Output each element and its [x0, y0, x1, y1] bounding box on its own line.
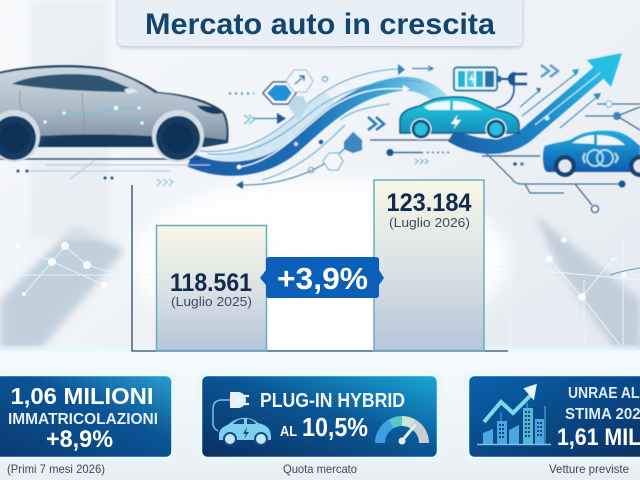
panel: plug-in hybrid: [202, 376, 438, 458]
bar: Luglio 2025: [156, 226, 266, 350]
lower arrowhead: [236, 181, 243, 189]
icon: plug and car: [213, 392, 271, 445]
right side circuit: [483, 104, 640, 205]
chevrons and arrow: [244, 115, 255, 124]
icon: rising chart with city: [477, 386, 551, 444]
road line: [370, 139, 460, 141]
panel: registrations: IMMATRICOLAZIONI: [8, 411, 158, 428]
panel: plug-in hybrid: PLUG-IN HYBRID: [260, 390, 405, 412]
title: Mercato auto in crescita: [145, 8, 495, 41]
growth arrow: [452, 53, 622, 146]
card glow: [0, 372, 640, 462]
bar: Luglio 2026: 123.184: [386, 189, 472, 217]
network decoration: left: [0, 238, 160, 296]
caption: forecast: Vetture previste: [549, 462, 629, 476]
icon: blue hybrid car: [543, 131, 640, 177]
panel: registrations: +8,9%: [46, 426, 113, 453]
arrowhead top: [398, 64, 405, 75]
white highlight line: [239, 89, 404, 167]
white gap between bars: [268, 298, 373, 350]
icon: battery and plug: [454, 68, 527, 108]
small top arrow: [412, 66, 433, 71]
panel: plug-in hybrid: 10,5%: [302, 412, 368, 442]
soft light under-swoosh: [200, 92, 336, 165]
growth badge: +3,9%: [277, 261, 368, 296]
hexagons: [263, 82, 296, 104]
panel: UNRAE forecast: [468, 376, 640, 458]
bar: Luglio 2026: [374, 180, 484, 350]
bar: Luglio 2026: (Luglio 2026): [389, 215, 470, 230]
bar: Luglio 2025: (Luglio 2025): [171, 294, 252, 309]
bar chart: [132, 180, 508, 351]
arrowhead highlight: [403, 85, 410, 92]
flow swoosh and circuit lines: [0, 64, 640, 212]
panel: registrations: 1,06 MILIONI: [10, 383, 154, 409]
blue chevrons: [368, 117, 384, 130]
growth badge: [260, 257, 384, 298]
network decoration: right: [490, 238, 640, 345]
panel: registrations: [0, 376, 172, 458]
icon: gauge: [380, 421, 424, 443]
title panel: [118, 0, 522, 46]
thin swoosh lines: [200, 69, 422, 180]
bar: Luglio 2025: 118.561: [170, 269, 252, 297]
caption: registrations: (Primi 7 mesi 2026): [7, 462, 105, 476]
small rising arrows: [520, 72, 598, 128]
chart axes: [132, 185, 508, 351]
connector: [386, 149, 394, 156]
icon: teal electric car: [400, 97, 519, 140]
dots: [229, 92, 254, 95]
main blue swoosh: [190, 84, 442, 169]
panel: plug-in hybrid: AL: [280, 423, 297, 440]
lower returning line: [240, 145, 348, 185]
caption: market share: Quota mercato: [283, 462, 357, 476]
icon: silver SUV: [0, 65, 229, 162]
